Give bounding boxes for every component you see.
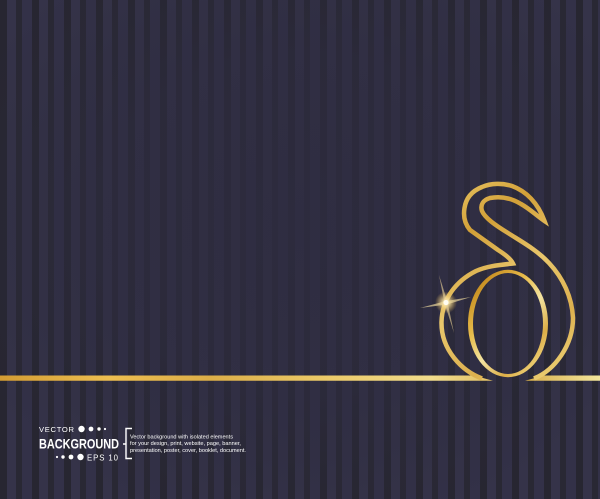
dots row top bbox=[78, 426, 106, 432]
logo: vector background eps 10 bbox=[39, 425, 246, 462]
label: EPS 10: EPS 10 bbox=[87, 454, 119, 462]
gold horizontal line bbox=[0, 376, 600, 381]
description text: presentation, poster, cover, booklet, document. bbox=[130, 448, 246, 454]
description text: Vector background with isolated elements bbox=[130, 434, 233, 440]
label: VECTOR: VECTOR bbox=[39, 425, 75, 434]
gold letter O ellipse bbox=[468, 270, 548, 377]
gold swan outline bbox=[441, 184, 573, 378]
sparkle star bbox=[420, 275, 471, 333]
dots row bottom bbox=[56, 454, 84, 460]
description text: for your design, print, website, page, banner, bbox=[130, 441, 241, 447]
label: BACKGROUND: BACKGROUND bbox=[39, 436, 119, 452]
description text bbox=[130, 434, 246, 454]
bracket bbox=[123, 428, 132, 458]
